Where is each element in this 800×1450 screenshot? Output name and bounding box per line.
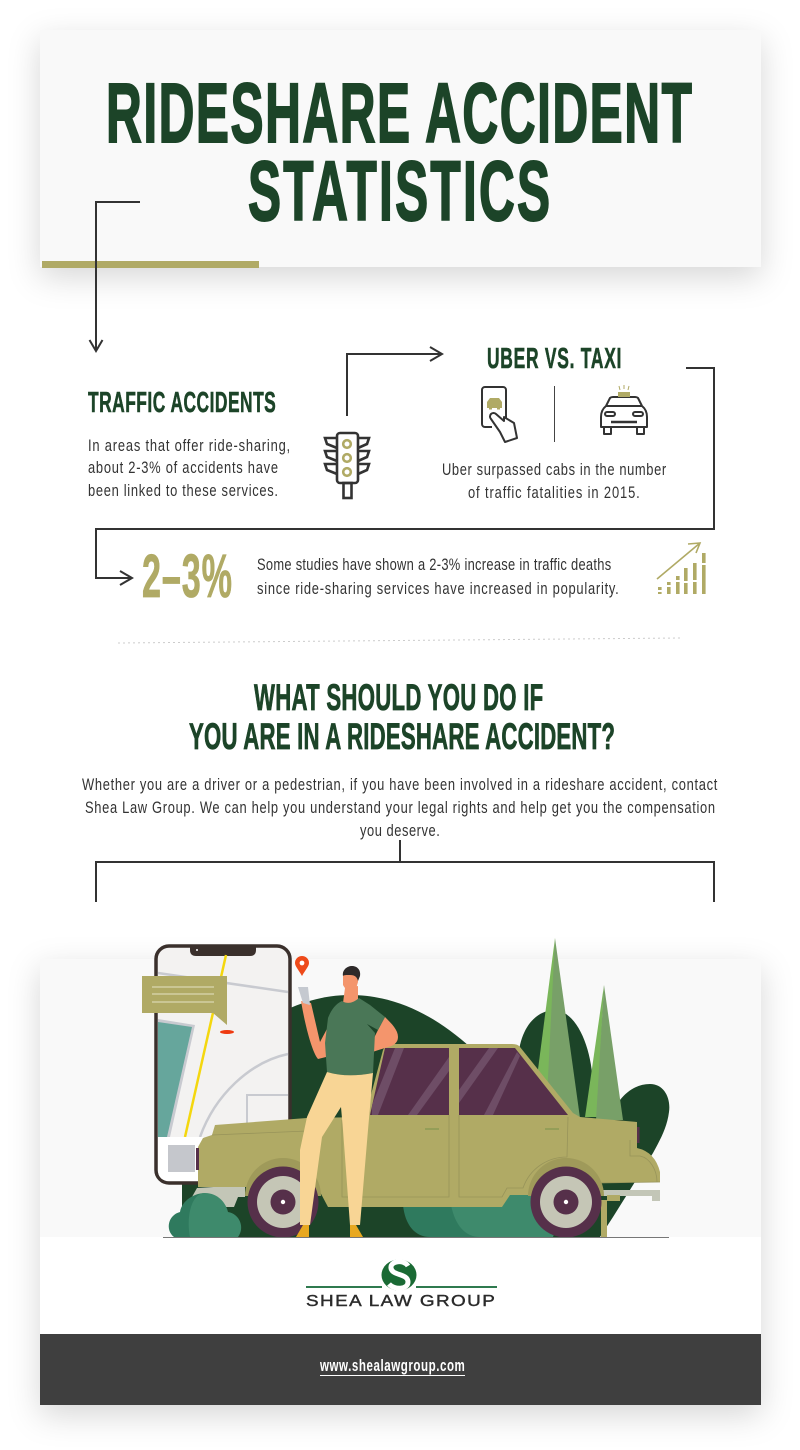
arrow: title to traffic accidents — [90, 202, 140, 351]
wheel: front — [248, 1166, 318, 1238]
footer bar — [40, 1334, 761, 1405]
title accent bar — [42, 261, 259, 268]
heading: traffic accidents: TRAFFIC ACCIDENTS — [88, 387, 276, 419]
text: advice paragraph: Whether you are a driver or a pedestrian, if you have been involved in a rideshare accident, contact — [82, 775, 718, 795]
panel: illustration and footer card — [40, 938, 761, 1405]
panel: traffic accidents — [88, 387, 290, 501]
arrow: traffic light to uber vs taxi — [347, 347, 442, 416]
logo: Shea Law Group — [306, 1260, 497, 1310]
text: advice paragraph — [82, 775, 718, 841]
arrow: uber vs taxi to statistic — [96, 368, 714, 585]
text: uber vs taxi description: of traffic fatalities in 2015. — [468, 483, 640, 503]
heading: what should you do: YOU ARE IN A RIDESHARE ACCIDENT? — [189, 716, 615, 757]
dark green background shapes — [182, 995, 669, 1237]
speech bubble — [142, 976, 227, 1025]
car — [196, 1044, 660, 1207]
map pin — [295, 956, 309, 976]
text: traffic accidents description: In areas that offer ride-sharing, — [88, 436, 290, 456]
text: traffic accidents description — [88, 436, 290, 501]
divider: phone and taxi — [554, 386, 555, 442]
text: traffic accidents description: been linked to these services. — [88, 481, 278, 501]
panel: statistic — [142, 543, 706, 611]
heading: what should you do — [189, 677, 615, 757]
logo: Shea Law Group: SHEA LAW GROUP — [306, 1291, 495, 1310]
title — [106, 66, 692, 238]
text: traffic accidents description: about 2-3% of accidents have — [88, 458, 278, 478]
panel: uber vs taxi — [442, 343, 666, 503]
stat: 2-3%: 2–3% — [142, 543, 232, 611]
phone with map — [156, 945, 290, 1183]
panel: what should you do — [82, 677, 718, 841]
heading: uber vs taxi: UBER VS. TAXI — [487, 343, 621, 375]
text: advice paragraph: you deserve. — [360, 821, 440, 841]
text: uber vs taxi description — [442, 460, 666, 503]
text: advice paragraph: Shea Law Group. We can help you understand your legal rights and help get you the compensation — [85, 798, 715, 818]
bracket connector — [96, 840, 714, 902]
website link: www.shealawgroup.com — [319, 1357, 465, 1376]
text: uber vs taxi description: Uber surpassed cabs in the number — [442, 460, 666, 480]
icon: taxi car — [601, 385, 647, 434]
rear bumper and post — [601, 1190, 660, 1237]
ground line — [163, 1237, 669, 1238]
icon: traffic light — [325, 433, 369, 498]
location marker shadow — [220, 1030, 234, 1034]
text: statistic description — [257, 555, 619, 599]
front bumper — [188, 1186, 245, 1207]
icon: rising bar chart — [657, 543, 706, 594]
trees — [536, 938, 623, 1120]
panel: title card — [40, 30, 761, 268]
person — [296, 966, 398, 1237]
illustration: driver with car and phone map — [142, 938, 669, 1238]
text: statistic description: since ride-sharing services have increased in popularity. — [257, 579, 619, 599]
title: RIDESHARE ACCIDENT — [106, 66, 692, 160]
wheel: rear — [530, 1166, 602, 1238]
bushes — [169, 1190, 570, 1237]
text: statistic description: Some studies have shown a 2-3% increase in traffic deaths — [257, 555, 611, 575]
icon: hand holding phone — [482, 387, 517, 442]
heading: what should you do: WHAT SHOULD YOU DO IF — [254, 677, 543, 718]
title: STATISTICS — [248, 144, 550, 238]
